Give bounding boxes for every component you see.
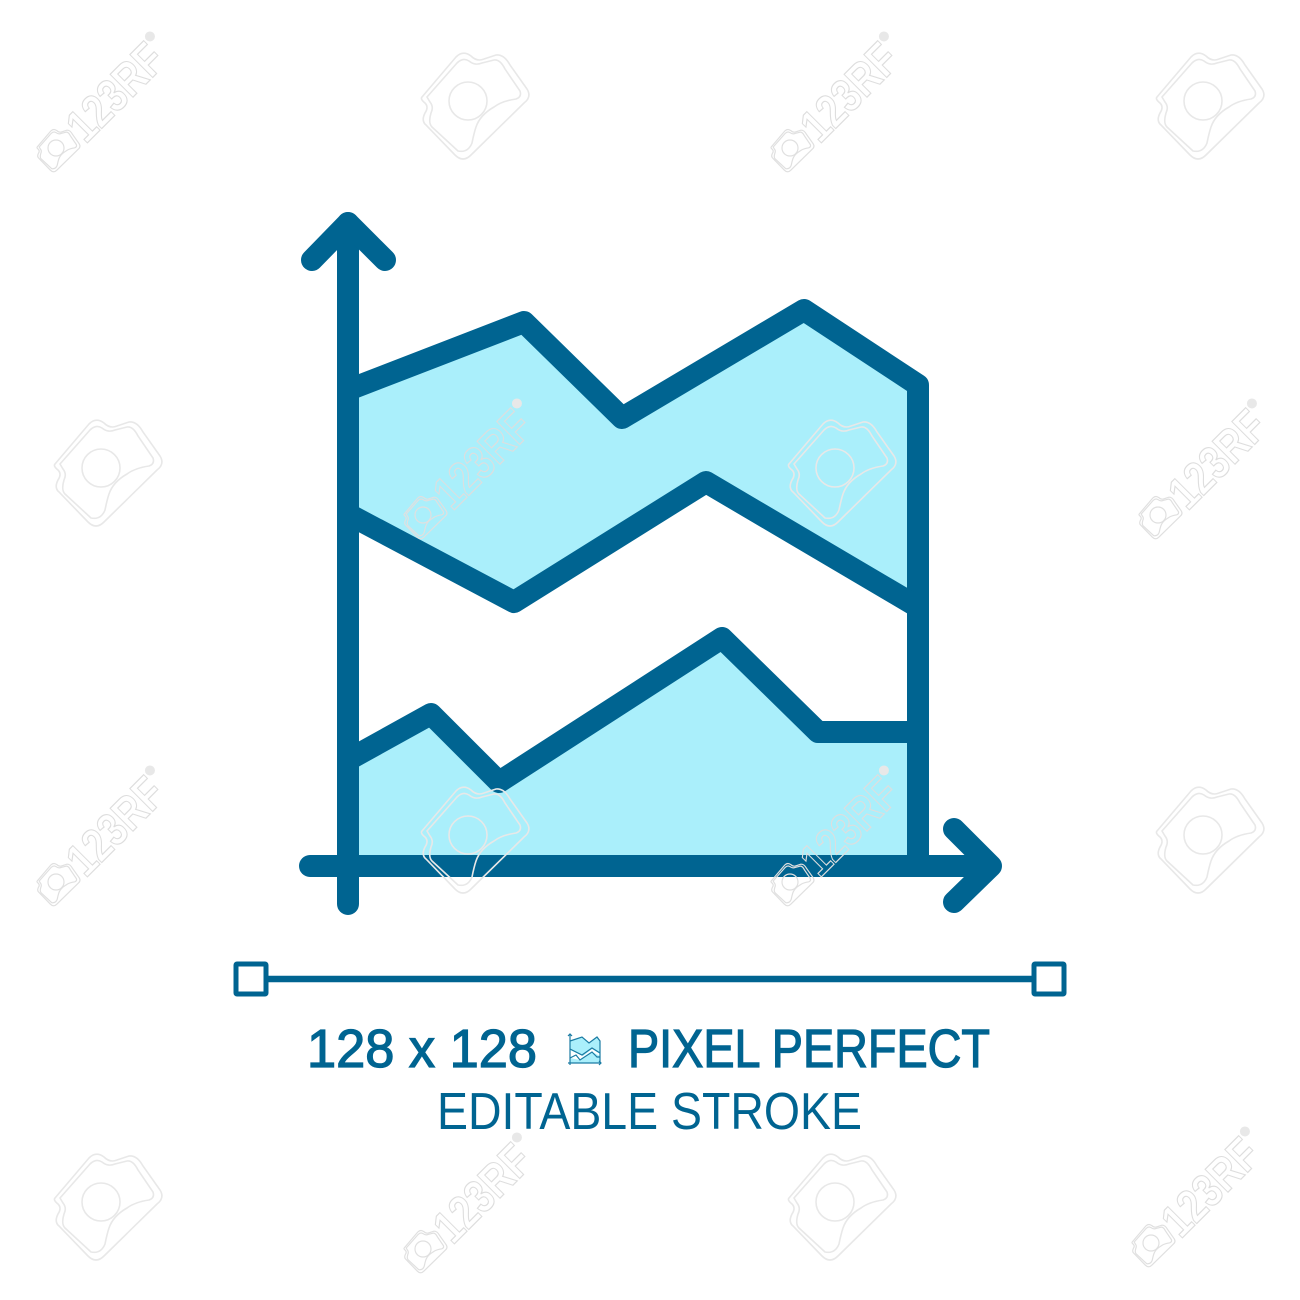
- watermark: 123RF wordmarks: 123RF: [1157, 399, 1277, 519]
- watermark: 123RF wordmarks: 123RF: [1150, 1127, 1270, 1247]
- watermark: 123RF wordmarks: 123RF: [422, 1133, 542, 1253]
- watermark: 123RF wordmarks: 123RF: [422, 399, 542, 519]
- chart icon: stacked area line chart: [310, 223, 991, 904]
- size ruler with end handles: [236, 964, 1064, 994]
- watermark: 123RF wordmarks: 123RF: [55, 766, 175, 886]
- label: editable stroke: EDITABLE STROKE: [437, 1083, 862, 1141]
- icon: miniature chart: [568, 1034, 601, 1065]
- label: pixel perfect: PIXEL PERFECT: [628, 1019, 990, 1079]
- size label: 128 x 128: [307, 1019, 537, 1079]
- watermark: 123RF wordmarks: 123RF: [55, 32, 175, 152]
- watermark: 123RF wordmarks: 123RF: [789, 766, 909, 886]
- watermark: 123RF wordmarks: 123RF: [789, 32, 909, 152]
- chart lines and axes: [310, 223, 991, 904]
- upper filled area: [348, 310, 918, 607]
- lower filled area: [348, 638, 918, 866]
